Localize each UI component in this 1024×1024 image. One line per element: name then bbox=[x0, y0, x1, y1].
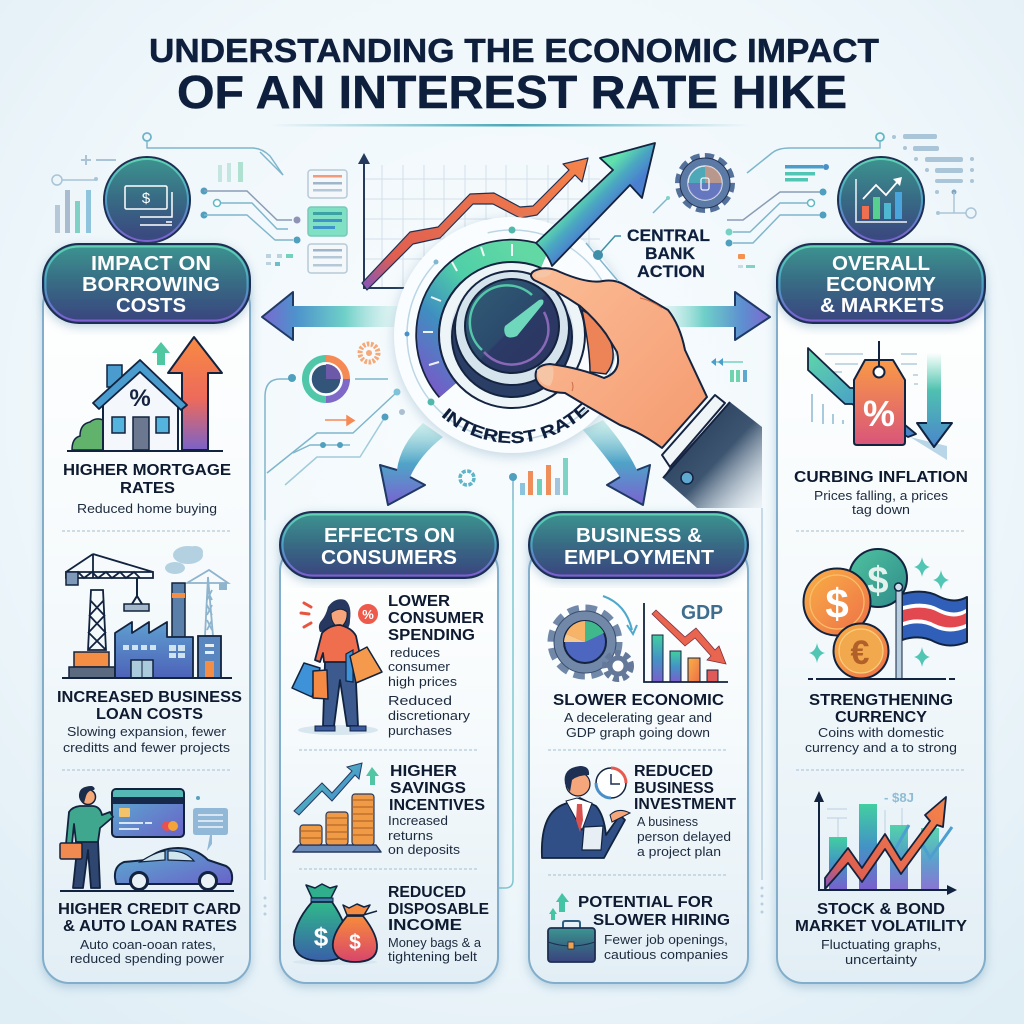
text: curbing inflation: Prices falling, a prices bbox=[814, 488, 949, 503]
heading pill: IMPACT ON bbox=[91, 253, 211, 275]
heading pill: OVERALL bbox=[832, 253, 930, 275]
text: higher savings incentives: Increased bbox=[388, 813, 448, 828]
text: higher savings incentives: INCENTIVES bbox=[389, 797, 485, 814]
text: strengthening currency: currency and a to strong bbox=[805, 740, 957, 755]
text: lower consumer spending bbox=[388, 593, 484, 738]
text: lower consumer spending: Reduced bbox=[388, 693, 452, 708]
left down arrow bbox=[380, 423, 443, 505]
heading pill: EMPLOYMENT bbox=[564, 547, 714, 569]
icon: coins and flag bbox=[804, 549, 967, 679]
panel: impact on borrowing costs bbox=[43, 157, 250, 983]
chart: GDP falling bbox=[644, 602, 728, 682]
suit cuff and sleeve bbox=[662, 395, 762, 508]
text: higher credit card and auto loan rates: HIGHER CREDIT CARD bbox=[58, 901, 241, 918]
text: reduced disposable income: REDUCED bbox=[388, 884, 466, 901]
right horizontal arrow bbox=[660, 292, 770, 340]
text: higher savings incentives: SAVINGS bbox=[390, 780, 466, 797]
dial label: INTEREST RATE bbox=[442, 404, 590, 444]
icon: money badge bbox=[104, 157, 190, 243]
text: reduced business investment: A business bbox=[637, 814, 698, 829]
text: curbing inflation: CURBING INFLATION bbox=[794, 469, 968, 486]
icon: house with rising arrow: % bbox=[129, 385, 151, 412]
icon: central bank gear bbox=[678, 156, 732, 210]
text: reduced business investment: person delayed bbox=[637, 829, 731, 844]
text: higher savings incentives: HIGHER bbox=[390, 763, 457, 780]
small info cards bbox=[308, 170, 347, 273]
heading pill bbox=[280, 512, 498, 578]
text: lower consumer spending: purchases bbox=[388, 723, 453, 738]
icon: person, credit card and car bbox=[60, 786, 234, 891]
text: reduced disposable income: DISPOSABLE bbox=[388, 901, 489, 918]
text: reduced disposable income: tightening belt bbox=[388, 949, 477, 964]
icon: coins and flag: € bbox=[851, 634, 870, 672]
heading pill: & MARKETS bbox=[820, 295, 944, 317]
text: stock and bond market volatility bbox=[795, 901, 968, 967]
title bbox=[149, 33, 880, 126]
panel: business and employment bbox=[529, 512, 748, 983]
title: OF AN INTEREST RATE HIKE bbox=[177, 66, 847, 118]
text: higher credit card and auto loan rates bbox=[58, 901, 241, 966]
text: strengthening currency: Coins with domestic bbox=[818, 725, 945, 740]
text: potential for slower hiring bbox=[578, 894, 730, 962]
text: stock and bond market volatility: STOCK & BOND bbox=[817, 901, 945, 918]
text: lower consumer spending: discretionary bbox=[388, 708, 471, 723]
text: strengthening currency: STRENGTHENING bbox=[809, 692, 953, 709]
heading pill: ECONOMY bbox=[826, 274, 937, 296]
text: curbing inflation bbox=[794, 469, 968, 517]
text: increased business loan costs: creditts and fewer projects bbox=[63, 740, 231, 755]
text: potential for slower hiring: cautious companies bbox=[604, 947, 729, 962]
text: higher credit card and auto loan rates: & AUTO LOAN RATES bbox=[63, 918, 237, 935]
left circuit decoration bbox=[52, 133, 300, 266]
icon: falling price tag: % bbox=[863, 393, 895, 434]
text: higher credit card and auto loan rates: reduced spending power bbox=[70, 951, 225, 966]
text: increased business loan costs: INCREASED BUSINESS bbox=[57, 689, 242, 706]
right down arrow bbox=[583, 420, 650, 505]
centre lower decorations bbox=[264, 344, 764, 916]
text: stock and bond market volatility: Fluctuating graphs, bbox=[821, 937, 941, 952]
title: UNDERSTANDING THE ECONOMIC IMPACT bbox=[149, 33, 880, 70]
heading pill: BUSINESS & bbox=[576, 525, 702, 547]
text: reduced disposable income bbox=[388, 884, 489, 964]
text: lower consumer spending: CONSUMER bbox=[388, 610, 484, 627]
right circuit decoration bbox=[653, 133, 976, 382]
text: lower consumer spending: SPENDING bbox=[388, 627, 475, 644]
text: curbing inflation: tag down bbox=[852, 502, 910, 517]
heading pill: CONSUMERS bbox=[321, 547, 457, 569]
text: reduced business investment: INVESTMENT bbox=[634, 796, 737, 813]
icon: money badge: $ bbox=[142, 190, 151, 207]
text: higher savings incentives: on deposits bbox=[388, 842, 461, 857]
heading pill: BORROWING bbox=[82, 274, 220, 296]
icon: decelerating gears bbox=[552, 596, 637, 679]
heading pill bbox=[529, 512, 748, 578]
text: higher mortgage rates: RATES bbox=[120, 480, 175, 497]
icon: woman with shopping bags bbox=[292, 599, 382, 735]
text: reduced disposable income: INCOME bbox=[388, 917, 462, 934]
central bank action label: ACTION bbox=[637, 262, 705, 281]
heading pill: EFFECTS ON bbox=[324, 525, 455, 547]
text: slower economic: SLOWER ECONOMIC bbox=[553, 692, 724, 709]
text: lower consumer spending: consumer bbox=[388, 659, 451, 674]
central bank action label: BANK bbox=[645, 244, 696, 263]
text: increased business loan costs bbox=[57, 689, 242, 755]
heading pill: COSTS bbox=[116, 295, 186, 317]
text: reduced business investment bbox=[634, 763, 737, 859]
text: higher savings incentives: returns bbox=[388, 828, 434, 843]
text: stock and bond market volatility: uncertainty bbox=[845, 952, 918, 967]
text: reduced disposable income: Money bags & a bbox=[388, 935, 482, 950]
icon: woman with shopping bags: % bbox=[362, 607, 374, 622]
text: potential for slower hiring: SLOWER HIRING bbox=[593, 912, 730, 929]
text: higher mortgage rates: Reduced home buying bbox=[77, 501, 217, 516]
icon: house with rising arrow bbox=[67, 337, 223, 451]
left horizontal arrow bbox=[262, 292, 400, 340]
icon: growth chart badge bbox=[838, 157, 924, 243]
icon: money bags: $ bbox=[349, 931, 361, 954]
icon: business person with clock bbox=[542, 766, 630, 858]
chart: market volatility: - $8J bbox=[884, 790, 914, 805]
panel: effects on consumers bbox=[280, 512, 498, 983]
text: lower consumer spending: high prices bbox=[388, 674, 458, 689]
text: higher credit card and auto loan rates: Auto coan-ooan rates, bbox=[80, 937, 216, 952]
hand turning dial bbox=[531, 268, 707, 448]
central bank action label: CENTRAL bbox=[627, 226, 710, 245]
icon: coins and flag: $ bbox=[825, 580, 849, 627]
text: reduced business investment: a project plan bbox=[637, 844, 721, 859]
text: increased business loan costs: Slowing expansion, fewer bbox=[67, 724, 227, 739]
text: higher savings incentives bbox=[388, 763, 485, 857]
text: lower consumer spending: reduces bbox=[390, 645, 441, 660]
interest rate dial bbox=[388, 214, 623, 462]
heading pill bbox=[777, 244, 985, 323]
text: strengthening currency: CURRENCY bbox=[835, 709, 928, 726]
icon: briefcase with arrows bbox=[548, 893, 595, 962]
text: reduced business investment: REDUCED bbox=[634, 763, 713, 780]
text: potential for slower hiring: POTENTIAL FOR bbox=[578, 894, 713, 911]
text: higher mortgage rates: HIGHER MORTGAGE bbox=[63, 462, 231, 479]
icon: falling price tag bbox=[808, 341, 952, 460]
central bank action label bbox=[586, 226, 710, 281]
text: reduced business investment: BUSINESS bbox=[634, 780, 714, 797]
panel: overall economy and markets bbox=[777, 157, 985, 983]
text: lower consumer spending: LOWER bbox=[388, 593, 450, 610]
icon: cranes and factory bbox=[62, 546, 232, 678]
text: increased business loan costs: LOAN COSTS bbox=[96, 706, 203, 723]
icon: money bags: $ bbox=[314, 922, 329, 952]
text: slower economic: GDP graph going down bbox=[566, 725, 710, 740]
rate line chart with grid bbox=[358, 153, 600, 290]
chart: GDP falling: GDP bbox=[681, 602, 723, 624]
text: stock and bond market volatility: MARKET VOLATILITY bbox=[795, 918, 968, 935]
icon: coins and flag: $ bbox=[867, 560, 889, 602]
big rising arrow bbox=[536, 143, 655, 266]
text: potential for slower hiring: Fewer job openings, bbox=[604, 932, 728, 947]
text: strengthening currency bbox=[805, 692, 957, 755]
icon: coin stacks and rising arrow bbox=[293, 763, 381, 852]
text: slower economic: A decelerating gear and bbox=[564, 710, 712, 725]
text: higher mortgage rates bbox=[63, 462, 231, 516]
text: slower economic bbox=[553, 692, 724, 740]
icon: money bags bbox=[293, 884, 377, 965]
chart: market volatility bbox=[814, 790, 957, 895]
heading pill bbox=[43, 244, 250, 323]
